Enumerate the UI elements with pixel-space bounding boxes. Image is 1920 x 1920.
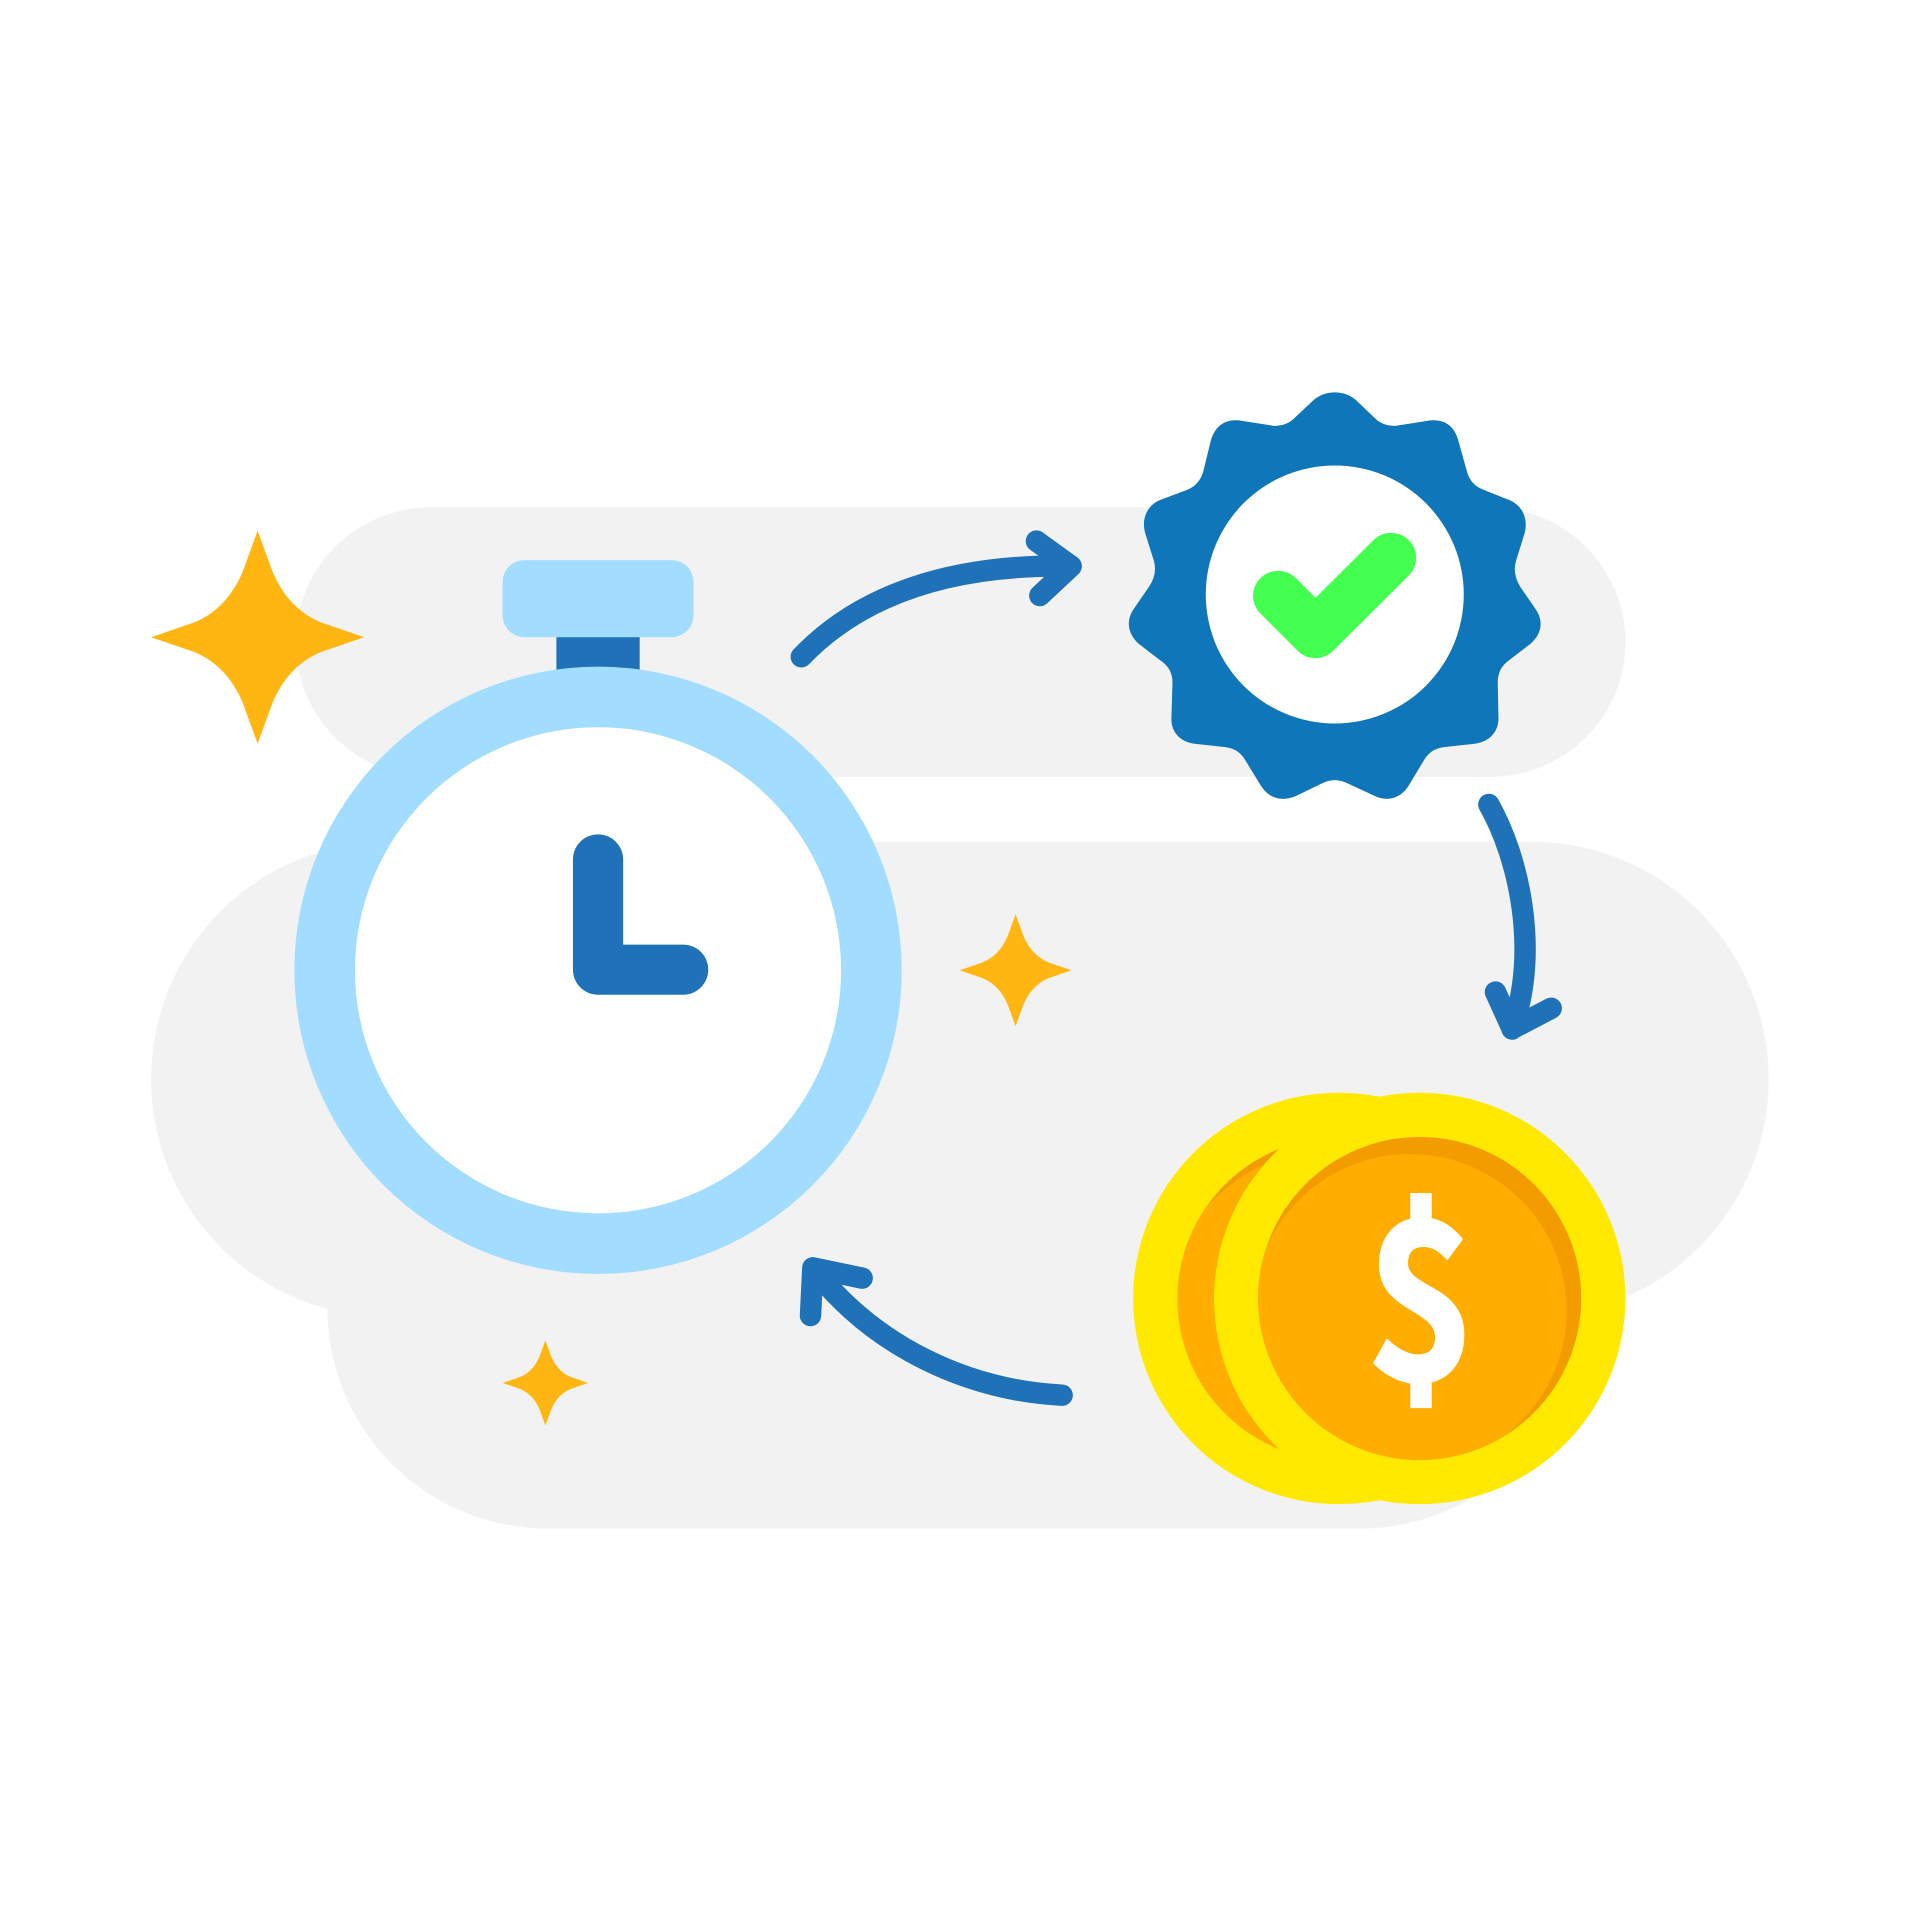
icon: medium sparkle <box>960 914 1072 1026</box>
arrow: badge to coins <box>1489 804 1551 1029</box>
badge white centre <box>1206 465 1464 723</box>
green check mark <box>1278 558 1391 633</box>
stopwatch face <box>355 727 841 1213</box>
front coin face <box>1253 1137 1581 1467</box>
stopwatch button <box>503 560 694 637</box>
icon: large sparkle <box>151 531 364 744</box>
icon: stopwatch <box>294 560 902 1274</box>
stopwatch stem <box>556 631 640 692</box>
badge scalloped seal <box>1129 392 1541 799</box>
clock hands <box>598 859 683 970</box>
dollar sign: $ <box>1366 1127 1476 1443</box>
background: grey blob <box>151 507 1769 1529</box>
stopwatch ring <box>294 667 902 1274</box>
icon: small sparkle <box>503 1340 588 1426</box>
illustration: time, quality and money cycle <box>151 392 1768 1528</box>
icon: quality badge with check mark <box>1129 392 1541 799</box>
arrow: coins to stopwatch <box>810 1268 1062 1395</box>
front coin rim <box>1214 1093 1625 1504</box>
icon: gold coins <box>1133 1093 1625 1514</box>
arrow: stopwatch to badge <box>801 541 1071 657</box>
back coin rim <box>1133 1093 1545 1504</box>
back coin crescent <box>1177 1149 1278 1449</box>
